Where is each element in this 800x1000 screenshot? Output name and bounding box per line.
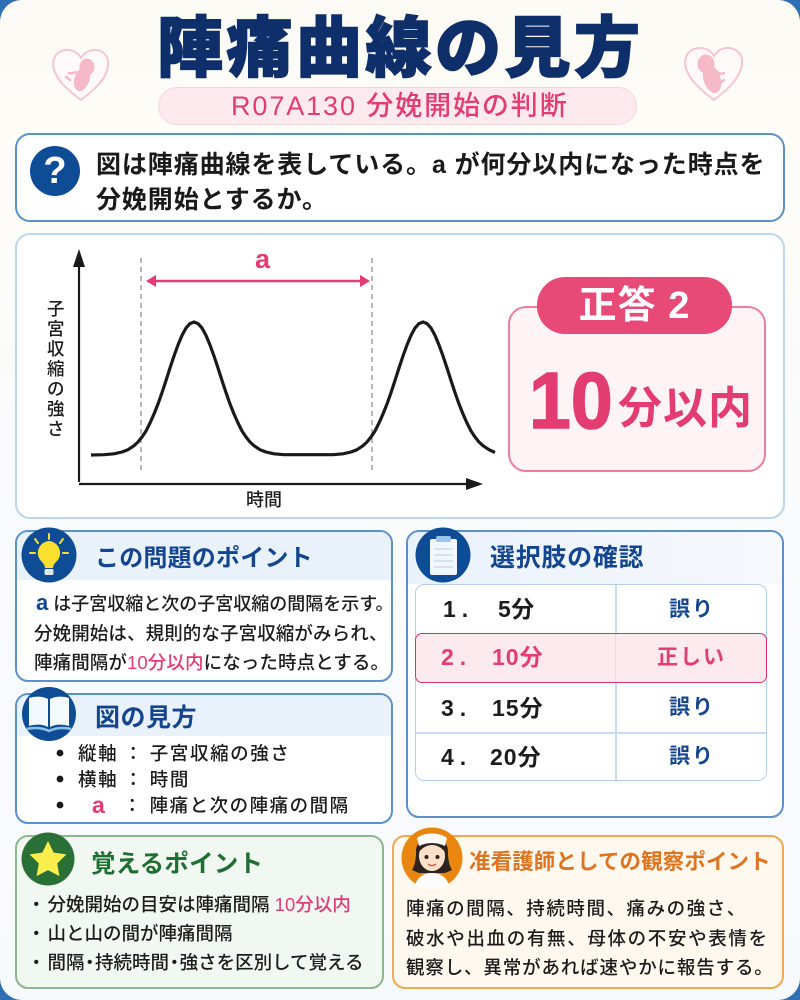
memorize list [27, 894, 363, 973]
panel: point of this question [15, 530, 393, 682]
panel: choices [406, 530, 784, 818]
explanation text: a は子宮収縮と次の子宮収縮の間隔を示す。 [36, 590, 393, 615]
list bullets [56, 750, 64, 808]
row 3: 誤り [669, 696, 715, 719]
answer badge [537, 277, 732, 334]
table: choices [415, 584, 767, 781]
heading: 選択肢の確認 [490, 544, 644, 572]
row 3 [441, 695, 715, 721]
row 2 highlighted: 正しい [657, 646, 726, 669]
row 4: 4. [441, 744, 472, 770]
row 3: 3. [441, 695, 472, 721]
question text: 図は陣痛曲線を表している。a が何分以内になった時点を [96, 151, 765, 179]
icon: heart with fetus right [684, 47, 743, 102]
observation text: 観察し、異常があれば速やかに報告する。 [406, 957, 774, 978]
icon: open book [22, 687, 76, 741]
subtitle text: R07A130 分娩開始の判断 [231, 91, 569, 121]
chart: contraction curve [73, 249, 496, 490]
answer unit: 分以内 [618, 384, 753, 433]
panel: nurse observation [392, 835, 784, 989]
axis list: a [92, 792, 105, 818]
axis list: ： 陣痛と次の陣痛の間隔 [123, 795, 350, 816]
panel: answer [508, 306, 766, 472]
observation text: 陣痛の間隔、持続時間、痛みの強さ、 [406, 898, 747, 919]
icon: question mark: ? [43, 150, 67, 192]
row 4: 20分 [490, 744, 542, 770]
heading: 准看護師としての観察ポイント [469, 850, 771, 874]
row 1: 1. [443, 596, 474, 622]
row 3: 15分 [492, 695, 544, 721]
heading: 覚えるポイント [91, 851, 263, 878]
row 2 highlighted: 2. [441, 644, 472, 670]
memorize list: ・間隔・持続時間・強さを区別して覚える [27, 952, 363, 973]
row 4 [441, 744, 715, 770]
memorize list: ・山と山の間が陣痛間隔 [27, 923, 233, 944]
answer badge: 正答 2 [579, 285, 690, 327]
explanation text: 陣痛間隔が10分以内になった時点とする。 [34, 652, 389, 673]
axis list: 横軸 ： 時間 [78, 769, 190, 790]
icon: light bulb [22, 528, 76, 582]
panel: how to read [15, 693, 393, 824]
heading: この問題のポイント [95, 545, 313, 572]
row 1 [443, 596, 715, 622]
icon: heart with fetus left [52, 49, 110, 102]
y axis label: 子宮収縮の強さ [47, 299, 64, 439]
row 1: 誤り [669, 598, 715, 621]
icon: clipboard [416, 528, 470, 582]
explanation text [34, 590, 393, 673]
row 1: 5分 [498, 596, 535, 622]
explanation text: 分娩開始は、規則的な子宮収縮がみられ、 [34, 623, 388, 644]
row 2 highlighted: 10分 [492, 644, 544, 670]
memorize list: ・分娩開始の目安は陣痛間隔 10分以内 [27, 894, 351, 915]
x axis label: 時間 [246, 490, 282, 510]
chart label: a: a [255, 244, 270, 274]
row 2 highlighted [415, 633, 767, 683]
panel: question [15, 133, 785, 222]
question text: 分娩開始とするか。 [96, 186, 328, 214]
panel: chart and answer [15, 233, 785, 519]
icon: question mark [30, 146, 80, 196]
title: 陣痛曲線の見方 [157, 11, 644, 85]
heading: 図の見方 [95, 704, 197, 732]
observation text [406, 898, 774, 978]
row 4: 誤り [669, 745, 715, 768]
axis list: 縦軸 ： 子宮収縮の強さ [78, 743, 290, 764]
subtitle pill [158, 87, 637, 125]
icon: star [22, 832, 74, 886]
panel: memorize [15, 835, 384, 989]
observation text: 破水や出血の有無、母体の不安や表情を [406, 928, 769, 948]
axis list [78, 743, 350, 818]
icon: nurse [402, 828, 462, 889]
answer value: 10 [529, 356, 613, 445]
question text [96, 151, 765, 214]
